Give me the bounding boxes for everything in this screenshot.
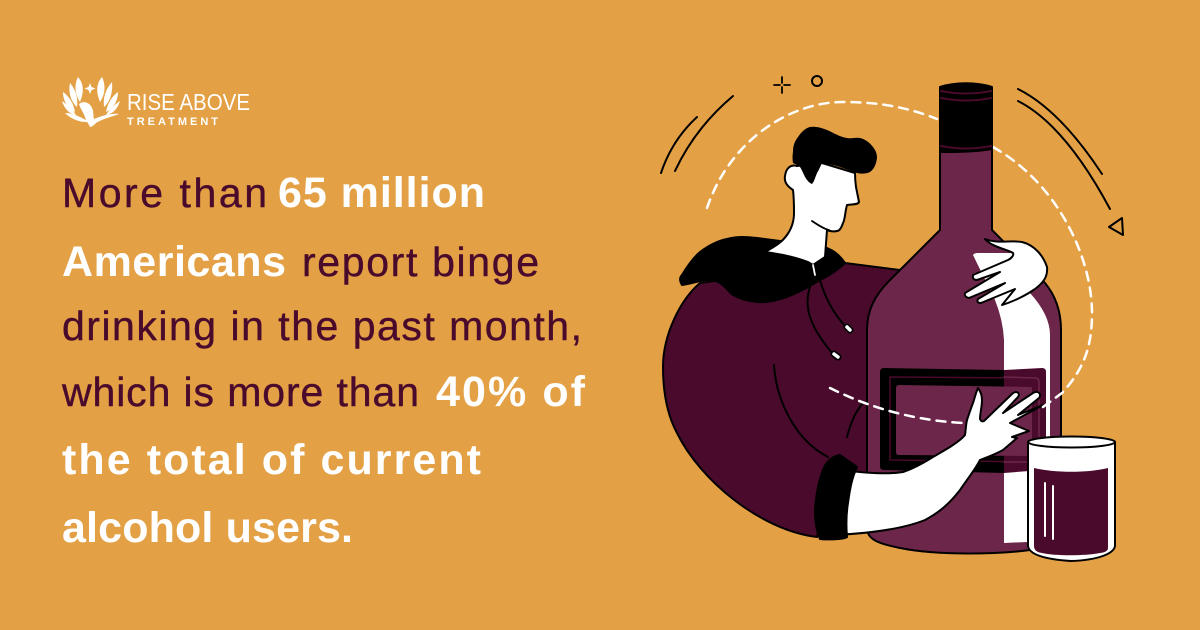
head and neck xyxy=(765,163,859,265)
hood strings xyxy=(808,280,846,354)
headline text: 65 million xyxy=(278,169,485,217)
glass highlights xyxy=(1045,483,1053,539)
headline text xyxy=(61,169,586,552)
headline text: which is more than xyxy=(61,369,419,415)
icon: triangle arrow xyxy=(1109,218,1123,235)
headline text: the total of current xyxy=(62,436,481,484)
bottle highlight xyxy=(973,253,1050,543)
icon: small circle xyxy=(812,76,822,86)
logo: Rise Above Treatment xyxy=(62,77,250,128)
bottle label xyxy=(880,368,1046,473)
motion arcs xyxy=(661,89,1110,209)
dashed orbit front xyxy=(830,388,1062,423)
logo tagline: TREATMENT xyxy=(127,116,218,128)
illustration: man hugging bottle xyxy=(661,76,1123,561)
hair xyxy=(793,127,877,184)
dashed orbit behind xyxy=(707,102,1092,393)
hoodie arm crease xyxy=(774,365,863,457)
icon: wreath with star xyxy=(62,77,120,127)
sleeve cuff xyxy=(815,455,857,539)
headline text: drinking in the past month, xyxy=(62,303,582,349)
hood xyxy=(680,237,845,302)
jaw line xyxy=(812,221,829,230)
headline text: More than xyxy=(62,170,267,216)
drink xyxy=(1034,468,1108,555)
glass rim xyxy=(1028,436,1115,448)
string tips xyxy=(834,327,850,357)
upper hand xyxy=(965,239,1047,305)
glass xyxy=(1028,436,1115,561)
headline text: alcohol users. xyxy=(62,504,353,552)
bottle xyxy=(867,83,1061,554)
headline text: report binge xyxy=(302,239,539,285)
logo wordmark: RISE ABOVE xyxy=(127,89,250,115)
hoodie body xyxy=(663,263,900,537)
icon: sparkle cross xyxy=(774,77,790,93)
bottle cap xyxy=(940,83,992,153)
collar line xyxy=(813,265,815,275)
cap lines xyxy=(941,91,991,148)
lower arm and hand xyxy=(835,388,1043,535)
headline text: 40% of xyxy=(436,368,586,416)
headline text: Americans xyxy=(62,238,286,286)
